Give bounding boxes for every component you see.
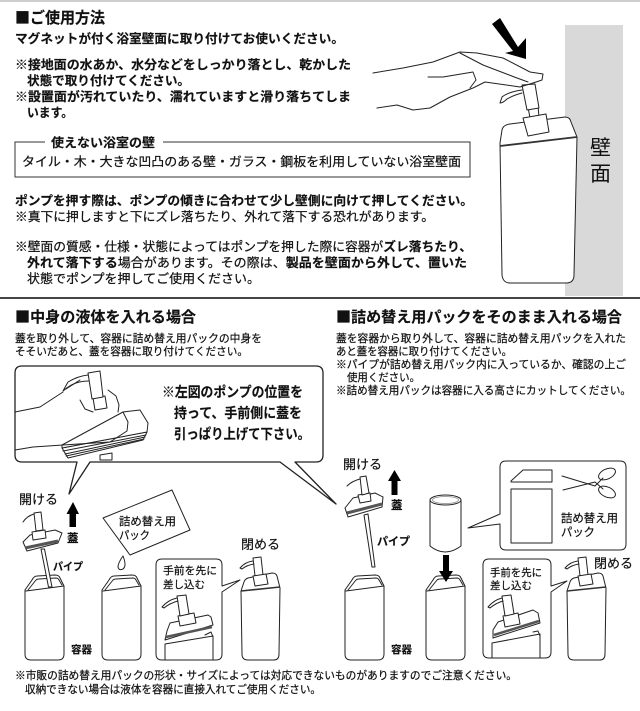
callout text [162, 384, 310, 442]
panel: insert front first right [483, 559, 567, 658]
icon: cylinder pack [430, 495, 461, 552]
callout text: ※左図のポンプの位置を [162, 384, 303, 400]
text block: insert pack: あと蓋を容器に取り付けてください。 [336, 345, 512, 358]
panel: cut pack: パック [561, 526, 595, 539]
icon: hand holding lid [15, 371, 148, 460]
panel: unusable walls: タイル・木・大きな凹凸のある壁・ガラス・鋼板を利用していない浴室壁面 [22, 155, 461, 169]
icon: lid with pipe left [23, 512, 62, 587]
arrow: lift lid right [388, 470, 401, 495]
label: close right: 閉める [594, 556, 633, 571]
label: lid right: 蓋 [391, 498, 403, 512]
label: pipe right: パイプ [377, 535, 410, 548]
icon: lid with pipe right [345, 476, 383, 567]
icon: refill pack: パック [119, 529, 150, 542]
icon: refill pack: 詰め替え用 [119, 514, 176, 528]
text block: pump warnings [15, 193, 473, 286]
heading: usage: ■ご使用方法 [15, 6, 105, 28]
icon: closed bottle right [565, 557, 606, 660]
text block: pour liquid: そそいだあと、蓋を容器に取り付けてください。 [15, 345, 248, 358]
icon: open container left [25, 575, 64, 660]
top rule [0, 0, 640, 2]
text block: magnet instructions [15, 31, 351, 120]
label: open left: 開ける [19, 492, 58, 507]
text block: insert pack: ※詰め替え用パックは容器に入る高さにカットしてください。 [336, 383, 631, 397]
icon: pump bottle with hand [373, 52, 577, 283]
text block: insert pack: 蓋を容器から取り外して、容器に詰め替え用パックを入れた [336, 331, 626, 345]
label: container left: 容器 [71, 643, 92, 656]
panel: insert front first left: 手前を先に [163, 564, 217, 577]
panel: unusable walls [15, 135, 470, 177]
footnote [15, 668, 517, 696]
icon: drop [118, 556, 125, 570]
arrow: lift lid left [66, 502, 79, 527]
text block: pump warnings: 状態でポンプを押してご使用ください。 [27, 271, 260, 286]
callout text: 持って、手前側に蓋を [174, 405, 302, 421]
text block: magnet instructions: ※設置面が汚れていたり、濡れていますと滑り落ちてしま [15, 89, 351, 104]
icon: refill pack [103, 490, 190, 555]
panel: insert front first left [156, 559, 240, 660]
label: open right: 開ける [343, 457, 382, 472]
panel: insert front first right: 差し込む [490, 579, 532, 592]
section divider [0, 297, 640, 299]
label: container right: 容器 [391, 643, 412, 656]
icon: open container right [345, 575, 384, 660]
panel: insert front first right: 手前を先に [490, 566, 542, 579]
arrow: press direction [492, 18, 526, 59]
arrow: insert pack [439, 555, 453, 582]
text block: magnet instructions: 状態で取り付けてください。 [27, 73, 190, 88]
panel: cut pack: 詰め替え用 [561, 511, 618, 525]
text block: magnet instructions: ※接地面の水あか、水分などをしっかり落とし、乾かした [15, 57, 351, 72]
text block: magnet instructions: います。 [27, 106, 73, 120]
icon: open container with pack [426, 575, 465, 660]
icon: scissors [562, 466, 617, 500]
callout text: 引っぱり上げて下さい。 [174, 426, 310, 442]
wall panel [565, 25, 623, 296]
panel: insert front first left: 差し込む [163, 578, 205, 591]
wall panel: 面 [590, 163, 611, 186]
wall panel: 壁 [590, 137, 611, 160]
text block: insert pack [336, 331, 631, 397]
text block: pump warnings: ※真下に押しますと下にズレ落ちたり、外れて落下する恐れがあります。 [15, 209, 434, 224]
icon: closed bottle left [240, 557, 280, 660]
callout: lid removal [15, 366, 336, 504]
heading: pour liquid: ■中身の液体を入れる場合 [15, 306, 196, 327]
panel: cut pack [468, 461, 626, 550]
label: close left: 閉める [241, 537, 280, 552]
text block: pour liquid: 蓋を取り外して、容器に詰め替え用パックの中身を [15, 331, 262, 345]
text block: pump warnings: ポンプを押す際は、ポンプの傾きに合わせて少し壁側に向けて押してください。 [15, 193, 473, 208]
label: pipe left: パイプ [53, 561, 83, 573]
text block: insert pack: 使用ください。 [347, 371, 420, 384]
text block: pump warnings: ※壁面の質感・仕様・状態によってはポンプを押した際に容器が ズレ落ちたり、 [15, 239, 472, 254]
footnote: ※市販の詰め替え用パックの形状・サイズによっては対応できないものがありますのでご注意ください。 [15, 668, 517, 682]
text block: pour liquid [15, 331, 262, 358]
text block: magnet instructions: マグネットが付く浴室壁面に取り付けてお使いください。 [15, 31, 344, 46]
panel: unusable walls: 使えない浴室の壁 [51, 135, 155, 150]
footnote: 収納できない場合は液体を容器に直接入れてご使用ください。 [25, 682, 321, 696]
heading: insert pack: ■詰め替え用パックをそのまま入れる場合 [336, 306, 622, 327]
text block: pump warnings: 外れて落下する場合があります。その際は、 製品を壁面から外して、置いた [27, 255, 467, 270]
icon: open container middle [102, 575, 141, 660]
text block: insert pack: ※パイプが詰め替え用パック内に入っているか、確認の上ご [336, 357, 626, 371]
label: lid left: 蓋 [67, 531, 79, 545]
